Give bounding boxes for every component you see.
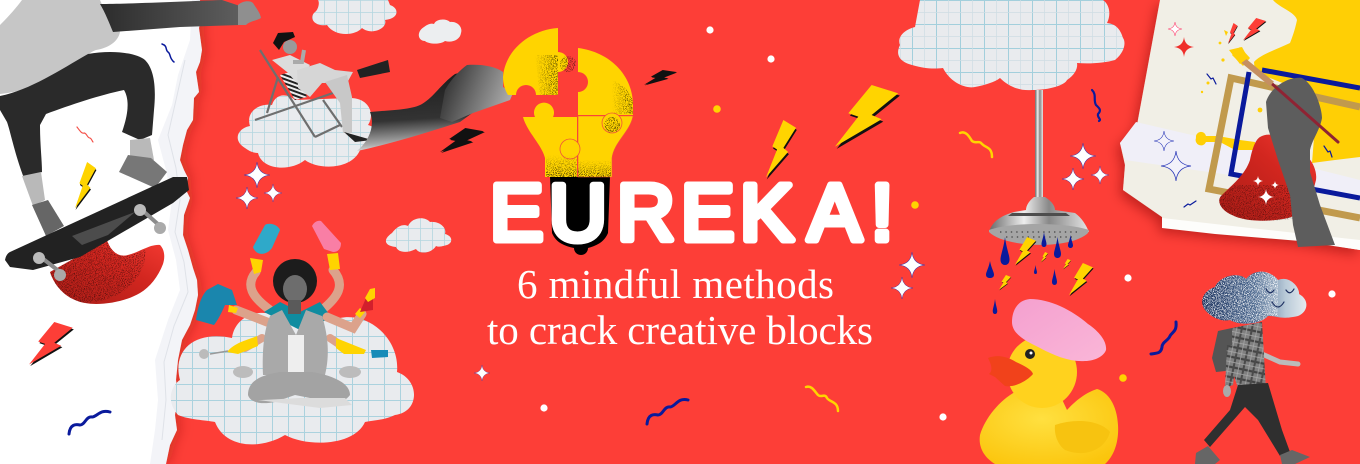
cloud: huge shower: [898, 0, 1124, 90]
eye: [1025, 349, 1035, 359]
paper sheet: [1120, 0, 1360, 250]
outline sparkles: [1154, 131, 1174, 151]
red spray bottle: [360, 298, 373, 312]
piece: top right: [578, 48, 633, 115]
cloud face: [1266, 289, 1294, 307]
toilet brush: [210, 351, 228, 354]
cloud: chair: [238, 95, 379, 168]
shower cap: [1012, 299, 1106, 361]
sparkles: [236, 143, 1109, 381]
red bell blob: [1219, 135, 1316, 221]
crossed legs: [248, 372, 350, 403]
piece: bottom right: [578, 116, 633, 177]
blue hand brush: [371, 350, 388, 358]
socks: [130, 138, 154, 165]
rubber duck with shower cap: [980, 299, 1118, 464]
painting hand and arm: [1266, 78, 1335, 247]
figure: meditating woman with six arms: [196, 221, 388, 408]
legs: [1204, 383, 1290, 456]
raised arm: [293, 50, 304, 62]
hand: [238, 1, 261, 25]
teal shirt: [264, 302, 332, 330]
trucks and wheels: [42, 210, 160, 272]
shoes: [119, 155, 167, 188]
hat: [273, 32, 295, 50]
sleeve: [100, 0, 240, 32]
face and neck: [283, 275, 307, 303]
flippers: [357, 60, 390, 78]
red blob grain: [1219, 185, 1300, 221]
duck head: [1007, 336, 1077, 408]
paint brush: [1270, 82, 1338, 142]
paint droplets: [1201, 42, 1262, 112]
torso: [272, 55, 310, 83]
middle arms: [236, 310, 362, 328]
cloud: meditation: [171, 313, 414, 444]
dark rim band: [1008, 213, 1070, 216]
far arm: [1262, 354, 1298, 364]
red blob: [50, 240, 164, 304]
chair frame: [255, 50, 342, 137]
spray nozzle: [365, 288, 375, 302]
yellow gloves: [227, 253, 366, 354]
figure: walker with cloud head: [1195, 272, 1310, 464]
jacket: [263, 310, 328, 375]
beak: [988, 356, 1033, 386]
water drops: [986, 232, 1073, 314]
duck wing: [1055, 421, 1110, 453]
confetti dots: [540, 26, 1336, 421]
nozzle holes: [1000, 232, 1078, 237]
puzzle knobs: [602, 113, 622, 133]
figure: shower head: [989, 90, 1089, 245]
paint splashes: [1196, 30, 1255, 150]
pipe: [1035, 90, 1043, 198]
blue rectangle: [1231, 70, 1360, 198]
lower leg: [325, 75, 352, 133]
white top: [288, 335, 304, 372]
figure: man on deck chair: [255, 32, 390, 142]
subtitle: [487, 261, 873, 353]
panel: torn white paper: [0, 0, 202, 464]
near arm: [1225, 345, 1238, 388]
cloud: small plain: [419, 20, 461, 44]
piece: bottom left: [523, 103, 577, 177]
upper arms: [251, 270, 339, 310]
hand and arm holding puzzle: [357, 65, 513, 151]
shoes: [1195, 446, 1220, 464]
panel: painted canvas: [1120, 0, 1360, 250]
thigh: [297, 63, 353, 97]
shower bolts: [999, 237, 1094, 296]
cloud: small grid: [386, 218, 451, 253]
blue sponge: [253, 224, 280, 254]
head top: [989, 197, 1089, 232]
cloud: top centre: [312, 0, 397, 34]
light bulb puzzle: [503, 28, 633, 255]
figure: skateboarder: [0, 0, 261, 304]
small bolts: [1228, 18, 1266, 44]
blue towel: [196, 284, 237, 325]
afro: [273, 259, 317, 303]
lightning bolts: [29, 70, 900, 366]
cloud head: [1202, 272, 1306, 324]
duck body: [980, 389, 1118, 464]
plaid shirt: [1232, 322, 1266, 390]
trousers: [0, 52, 155, 178]
pink sponge: [312, 221, 341, 252]
red blob grain: [50, 240, 145, 303]
subtitle: to crack creative blocks: [487, 307, 873, 353]
subtitle: 6 mindful methods: [517, 261, 834, 307]
squiggles: [69, 44, 1332, 434]
backpack: [1212, 328, 1235, 372]
bulb socket: [550, 177, 610, 255]
stipple shading: [535, 55, 633, 177]
golden frame: [1209, 78, 1360, 218]
head: [283, 40, 297, 54]
yellow paint: [1254, 0, 1360, 163]
piece: top left: [503, 28, 568, 95]
hand: [1223, 385, 1231, 397]
cloud head glitter: [1202, 272, 1278, 324]
chair stripes: [280, 70, 307, 100]
meditating hands: [233, 366, 253, 378]
red sparkles: [1174, 37, 1194, 57]
title: EUREKA!: [490, 168, 893, 257]
white sparkles: [1258, 189, 1274, 205]
white tape strip: [1120, 122, 1360, 200]
sweater: [0, 0, 120, 94]
head face: [989, 224, 1089, 245]
torn bottom edge: [1162, 218, 1360, 250]
skateboard: [5, 177, 189, 270]
